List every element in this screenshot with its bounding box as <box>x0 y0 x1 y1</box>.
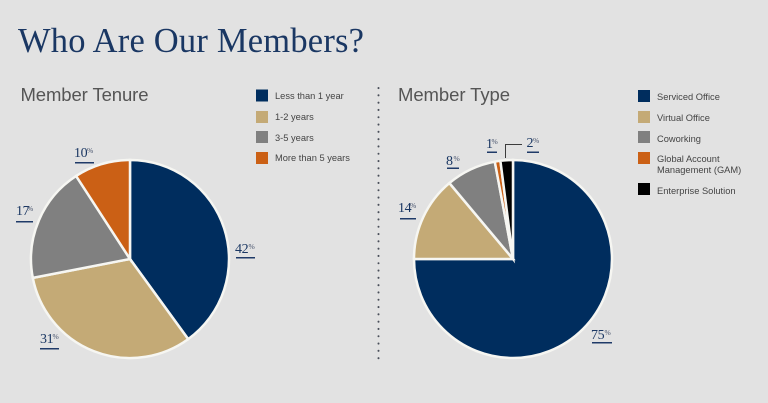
legend: member tenure: Less than 1 year <box>275 91 344 101</box>
legend: member type <box>638 90 741 196</box>
pie chart: member tenure <box>31 160 229 358</box>
label: 2% with leader line: 2 <box>526 136 534 151</box>
legend: member type: Enterprise Solution <box>657 186 736 196</box>
divider <box>378 88 380 362</box>
label: 17%: % <box>27 204 33 213</box>
label: 10% <box>74 146 94 164</box>
label: 31%: % <box>52 332 59 341</box>
label: 31%: 31 <box>40 332 54 347</box>
label: 17%: 17 <box>16 204 30 219</box>
label: 17% <box>16 204 33 222</box>
label: 75%: 75 <box>591 328 605 343</box>
legend: member type: Coworking <box>657 134 701 144</box>
label: 1% <box>486 137 498 153</box>
label: 42% <box>235 242 255 258</box>
label: 2% with leader line <box>506 136 539 158</box>
label: 10%: % <box>87 146 93 155</box>
heading: Member Tenure: Member Tenure <box>20 84 148 105</box>
label: 42%: 42 <box>235 242 249 257</box>
legend: member type: Global Account <box>657 154 720 164</box>
heading: Member Type: Member Type <box>398 84 510 105</box>
legend: member type: Serviced Office <box>657 92 720 102</box>
pie chart: member type <box>414 160 612 358</box>
label: 42%: % <box>248 242 255 251</box>
label: 8%: 8 <box>446 154 453 169</box>
label: 75% <box>591 328 612 344</box>
legend: member tenure: 3-5 years <box>275 133 314 143</box>
label: 14%: % <box>410 201 416 210</box>
label: 10%: 10 <box>74 146 88 161</box>
label: 2% with leader line: % <box>533 136 539 145</box>
legend: member type: Management (GAM) <box>657 165 741 175</box>
legend: member tenure: 1-2 years <box>275 112 314 122</box>
legend: member tenure: More than 5 years <box>275 153 350 163</box>
label: 31% <box>40 332 59 350</box>
label: 8% <box>446 154 460 169</box>
label: 1%: 1 <box>486 137 493 152</box>
title: Who Are Our Members? <box>18 22 364 60</box>
label: 1%: % <box>492 137 498 146</box>
label: 75%: % <box>604 328 611 337</box>
label: 14%: 14 <box>398 201 412 216</box>
label: 8%: % <box>454 154 460 163</box>
label: 14% <box>398 201 416 220</box>
legend: member tenure <box>256 90 350 164</box>
legend: member type: Virtual Office <box>657 113 710 123</box>
